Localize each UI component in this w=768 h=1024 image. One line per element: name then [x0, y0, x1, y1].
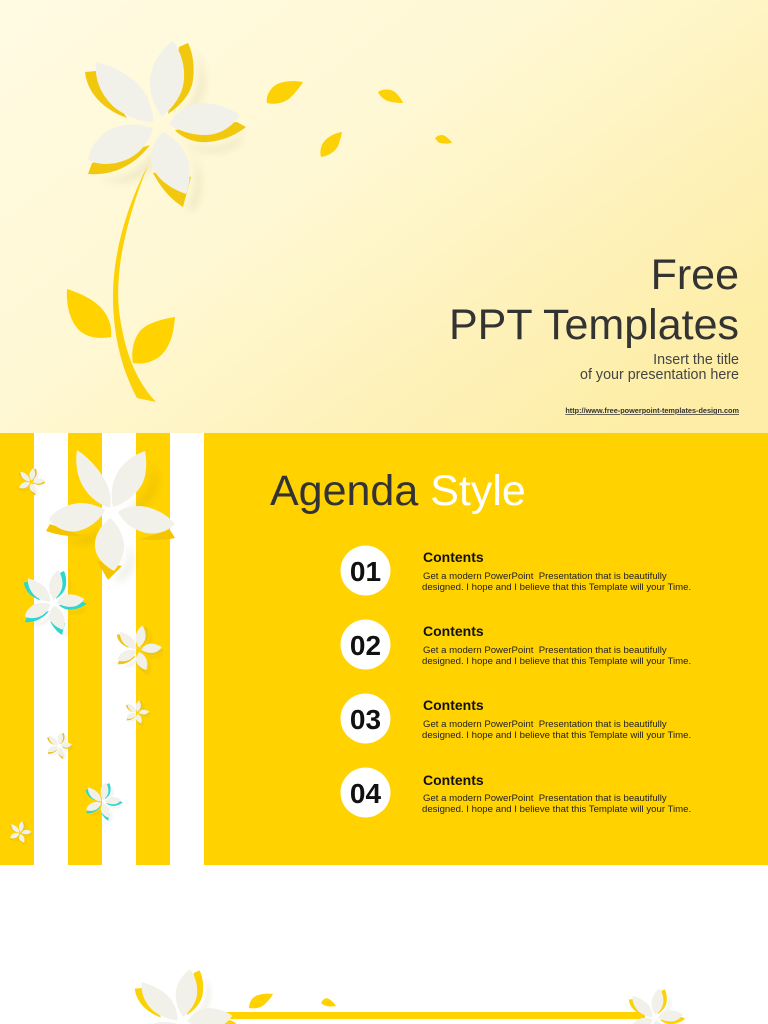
icon: drifting petal 2: [321, 998, 336, 1007]
icon: drifting petals: [267, 81, 452, 157]
agenda item 01: designed. I hope and I believe that this Template will your Time.: [422, 582, 691, 593]
agenda item 02: Get a modern PowerPoint Presentation that is beautifully: [423, 645, 667, 656]
agenda item 01: Contents: [423, 549, 484, 565]
icon: drifting petal 1: [249, 994, 273, 1008]
agenda item 01: Get a modern PowerPoint Presentation that is beautifully: [423, 571, 667, 582]
agenda item 02: 02: [350, 630, 381, 661]
icon: teal flower 2: [86, 783, 123, 822]
icon: small yellow flower 5: [10, 821, 32, 845]
agenda item 04: Contents: [423, 772, 484, 788]
icon: right leaf: [132, 317, 175, 364]
icon: large flower on stripes: [46, 450, 175, 582]
title: Free: [651, 251, 739, 299]
icon: flower stem: [113, 165, 156, 402]
subtitle: Insert the title: [653, 352, 739, 368]
icon: small yellow flower 1: [19, 468, 45, 496]
heading: Agenda Style: [270, 467, 526, 515]
agenda item 02: [340, 620, 691, 670]
cover background: [0, 0, 768, 433]
icon: small yellow flower 4: [47, 733, 73, 760]
agenda item 04: designed. I hope and I believe that this Template will your Time.: [422, 804, 691, 815]
website link: http://www.free-powerpoint-templates-design.com: [565, 406, 740, 415]
panel: agenda slide: [0, 433, 768, 865]
agenda item 03: 03: [350, 704, 381, 735]
icon: bottom right flower: [629, 989, 685, 1024]
agenda item 04: 04: [350, 778, 381, 809]
agenda item 03: Contents: [423, 697, 484, 713]
agenda item 02: Contents: [423, 623, 484, 639]
subtitle: of your presentation here: [580, 367, 739, 383]
panel: third slide top: [135, 969, 685, 1024]
yellow rule: [225, 1012, 645, 1019]
icon: teal flower 1: [24, 570, 87, 637]
icon: bottom left flower: [135, 969, 236, 1024]
title: PPT Templates: [449, 301, 739, 349]
icon: yellow flower 2: [117, 626, 163, 675]
agenda item 02: designed. I hope and I believe that this Template will your Time.: [422, 656, 691, 667]
panel: cover slide: [0, 0, 768, 433]
agenda item 01: [340, 546, 691, 596]
agenda item 04: [340, 768, 691, 818]
icon: left leaf: [67, 289, 111, 338]
agenda item 04: Get a modern PowerPoint Presentation that is beautifully: [423, 793, 667, 804]
agenda item 01: 01: [350, 556, 381, 587]
agenda background: [0, 433, 768, 865]
agenda item 03: [340, 694, 691, 744]
icon: large paper flower: [85, 41, 246, 212]
agenda item 03: Get a modern PowerPoint Presentation that is beautifully: [423, 719, 667, 730]
agenda item 03: designed. I hope and I believe that this Template will your Time.: [422, 730, 691, 741]
icon: small yellow flower 3: [126, 700, 150, 726]
white stripes: [34, 433, 204, 865]
